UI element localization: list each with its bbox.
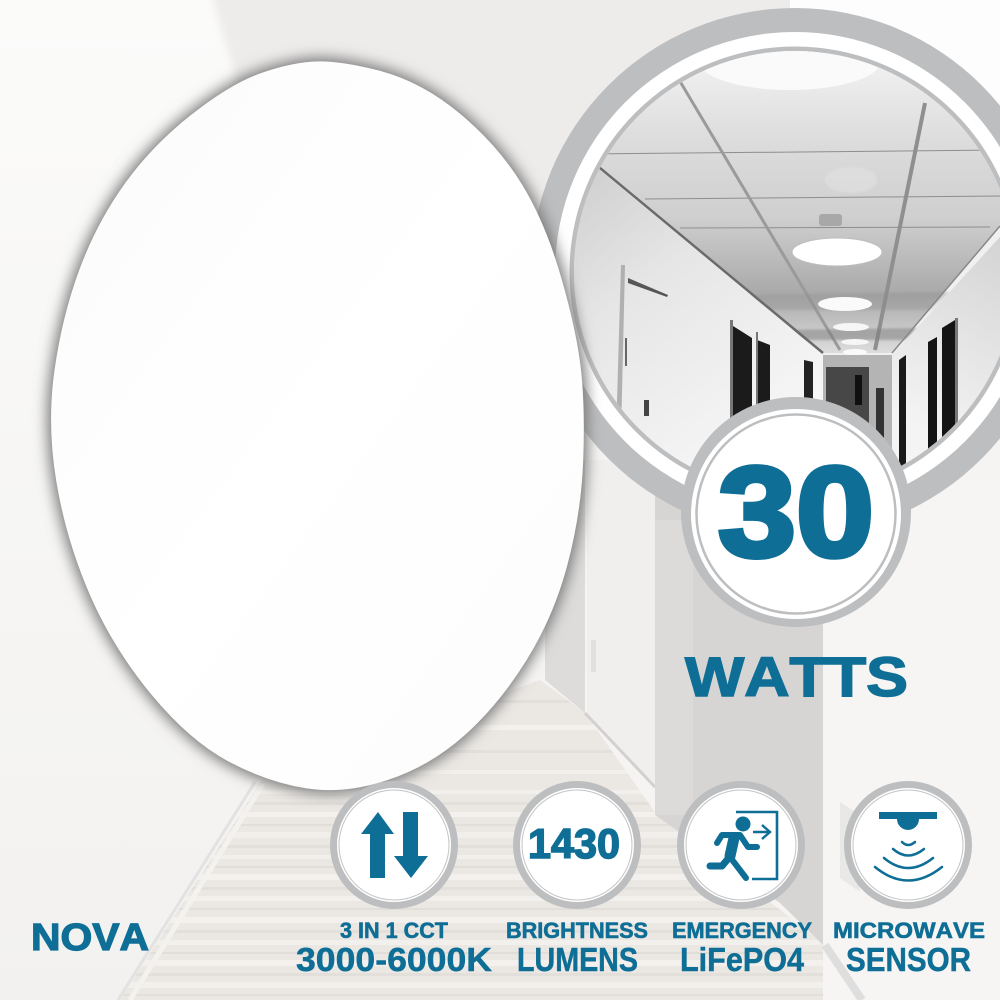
label: brightness: [506, 918, 648, 978]
icon: running man exit: [710, 812, 777, 879]
feature: sensor: [833, 781, 985, 978]
ceiling: [588, 30, 1000, 353]
icon: lumens value: 1430: [528, 820, 620, 867]
wattage number: 30: [718, 441, 874, 584]
right doors: [942, 320, 955, 437]
label: emergency: LiFePO4: [680, 941, 805, 978]
icon: up and down arrows: [361, 812, 428, 878]
label: CCT: [296, 918, 492, 978]
floor edge trim: [118, 782, 255, 1000]
feature: emergency: [672, 781, 812, 978]
floor: [120, 680, 823, 1000]
end wall and door: [823, 355, 892, 448]
wattage badge: [681, 397, 911, 627]
smoke detector: [819, 214, 842, 226]
label: emergency: [672, 918, 812, 978]
lamp: round white LED ceiling light: [51, 61, 584, 790]
left doors: [733, 326, 752, 418]
photo ring: large grey circle with corridor photo: [531, 8, 1000, 536]
corridor doors and walls: [545, 460, 585, 713]
icon: microwave sensor: [875, 812, 942, 880]
label: sensor: [833, 918, 985, 978]
label: CCT: 3 IN 1 CCT: [340, 918, 449, 943]
room door frame: [617, 265, 625, 409]
feature: CCT: [296, 781, 492, 978]
label: emergency: EMERGENCY: [672, 918, 812, 943]
label: brightness: BRIGHTNESS: [506, 918, 648, 943]
label: sensor: SENSOR: [846, 941, 971, 978]
label: CCT: 3000-6000K: [296, 941, 492, 978]
ceiling bands: [745, 292, 950, 310]
product name: NOVA: [31, 917, 149, 959]
label: brightness: LUMENS: [517, 941, 638, 978]
walls: [574, 170, 806, 466]
label: sensor: MICROWAVE: [833, 918, 985, 943]
ceiling lights: [704, 51, 878, 90]
corridor photo: [574, 51, 1000, 466]
feature: brightness: [506, 781, 648, 978]
wattage unit: WATTS: [685, 645, 908, 708]
